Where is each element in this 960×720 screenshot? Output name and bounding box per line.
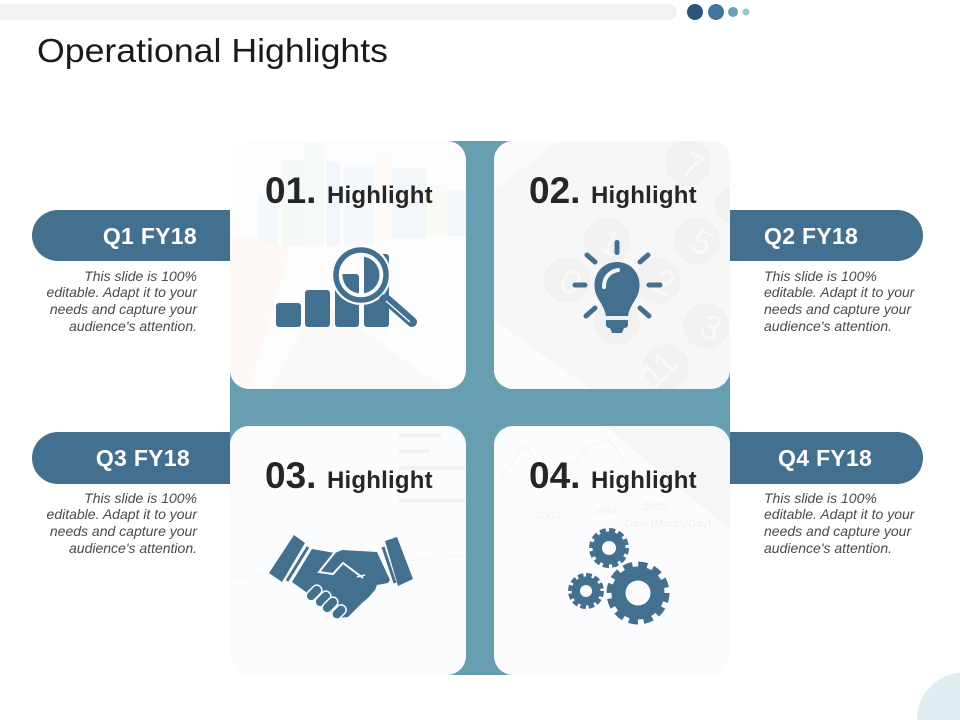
heading: 02 Highlight: Highlight — [591, 182, 697, 209]
cross backdrop — [230, 141, 730, 675]
pill: Q2 FY18 — [730, 210, 923, 261]
icon: bar chart with magnifier — [276, 245, 412, 327]
text block: Q2 description: needs and capture your — [764, 301, 912, 317]
top decorative bar — [0, 4, 677, 20]
heading: 03 Highlight: 03. — [265, 455, 316, 496]
text block: Q1 description: needs and capture your — [50, 301, 198, 317]
text block: Q3 description: editable. Adapt it to your — [47, 506, 198, 522]
panel: highlight 04: Date (Month/Day) — [625, 518, 711, 530]
top decorative dots — [687, 4, 750, 20]
pill: Q3 FY18 — [32, 432, 230, 484]
heading: 01 Highlight — [265, 170, 433, 211]
panel: highlight 04: 2004 — [593, 506, 617, 518]
panel: highlight 04: 2003 — [536, 510, 560, 522]
panel: highlight 02: 7 — [676, 145, 709, 187]
text block: Q3 description: needs and capture your — [50, 523, 198, 539]
pill: Q3 FY18: Q3 FY18 — [96, 445, 190, 471]
icon: gears — [570, 530, 666, 621]
panel: highlight 02: 0 — [554, 261, 587, 303]
heading: 03 Highlight — [265, 455, 433, 496]
text block: Q4 description: This slide is 100% — [764, 490, 877, 506]
text block: Q2 description — [764, 268, 916, 334]
panel: highlight 02: 1 — [593, 222, 626, 264]
text block: Q2 description: editable. Adapt it to your — [764, 284, 916, 300]
text block: Q3 description — [47, 490, 198, 556]
text block: Q2 description: This slide is 100% — [764, 268, 877, 284]
pill: Q4 FY18 — [730, 432, 923, 484]
text block: Q3 description: This slide is 100% — [84, 490, 197, 506]
text block: Q1 description — [47, 268, 198, 334]
heading: 04 Highlight: 04. — [529, 455, 580, 496]
heading: 01 Highlight: 01. — [265, 170, 316, 211]
heading: 02 Highlight — [529, 170, 697, 211]
text block: Q4 description — [764, 490, 916, 556]
text block: Q1 description: audience's attention. — [69, 318, 197, 334]
pill: Q2 FY18: Q2 FY18 — [764, 223, 858, 249]
panel: highlight 04: 2005 — [643, 501, 667, 513]
heading: 03 Highlight: Highlight — [327, 467, 433, 494]
panel: highlight 04 — [494, 426, 730, 675]
panel: highlight 01 — [230, 141, 466, 389]
text block: Q2 description: audience's attention. — [764, 318, 892, 334]
text block: Q1 description: editable. Adapt it to your — [47, 284, 198, 300]
title: Operational Highlights — [37, 32, 388, 69]
text block: Q4 description: audience's attention. — [764, 540, 892, 556]
icon: light bulb — [575, 242, 660, 333]
text block: Q1 description: This slide is 100% — [84, 268, 197, 284]
panel: highlight 02: 11 — [633, 343, 685, 395]
text block: Q4 description: editable. Adapt it to your — [764, 506, 916, 522]
heading: 04 Highlight: Highlight — [591, 467, 697, 494]
pill: Q1 FY18: Q1 FY18 — [103, 223, 197, 249]
panel: highlight 02: 2 — [648, 262, 681, 304]
panel: highlight 02: 5 — [685, 222, 718, 264]
panel: highlight 02: 3 — [694, 307, 727, 349]
pill: Q1 FY18 — [32, 210, 230, 261]
text block: Q4 description: needs and capture your — [764, 523, 912, 539]
heading: 01 Highlight: Highlight — [327, 182, 433, 209]
text block: Q3 description: audience's attention. — [69, 540, 197, 556]
panel: highlight 02 — [494, 141, 730, 389]
heading: 04 Highlight — [529, 455, 697, 496]
pill: Q4 FY18: Q4 FY18 — [778, 445, 872, 471]
icon: handshake — [269, 535, 413, 621]
panel: highlight 03 — [230, 426, 466, 675]
corner decoration — [917, 673, 960, 720]
heading: 02 Highlight: 02. — [529, 170, 580, 211]
